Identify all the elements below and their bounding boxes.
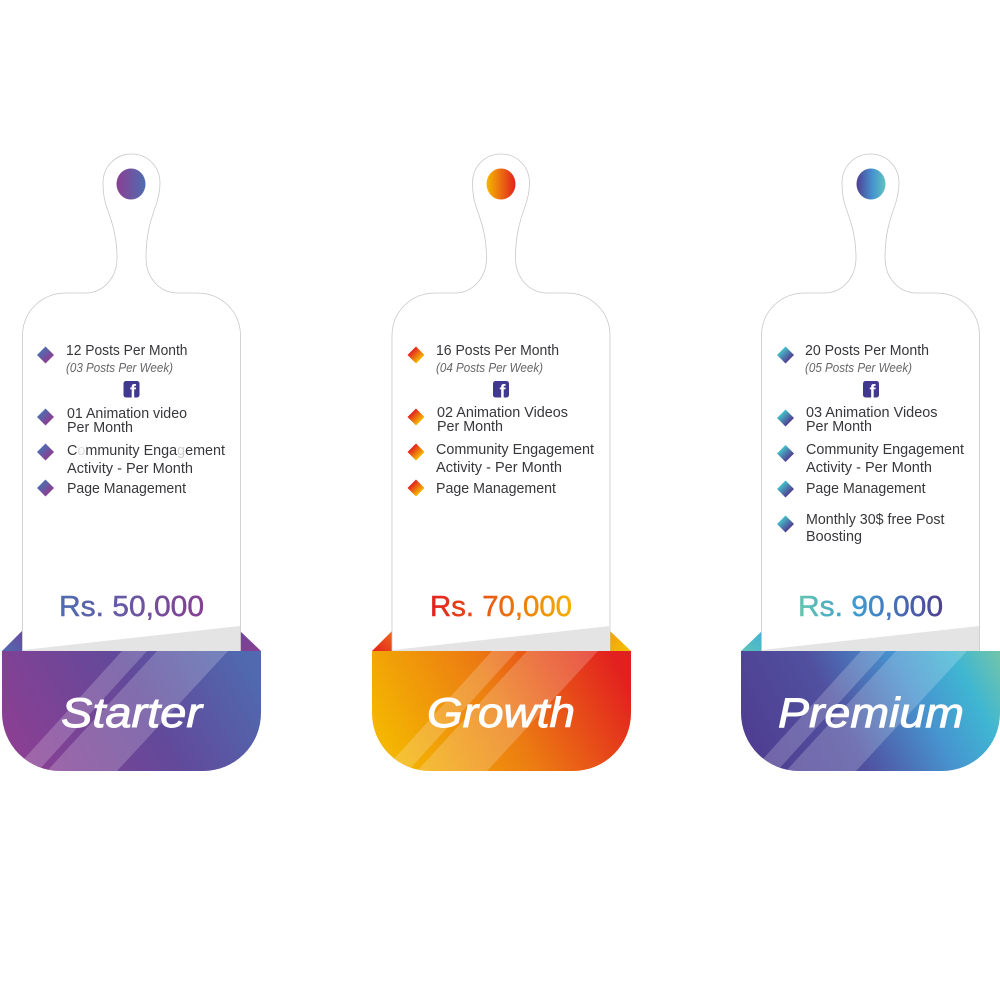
text: animation videos: 03 Animation Videos [806,405,938,421]
band title: Premium [778,689,964,736]
text: per month: Per Month [806,419,872,435]
icon: facebook: f [500,382,506,402]
icon: bullet 4 [777,480,794,498]
icon: bullet 1 [408,346,424,364]
paper shadow [23,626,240,651]
text: activity per month: Activity - Per Month [67,461,193,477]
text: boosting: Boosting [806,529,862,545]
icon: circle hole [116,168,146,200]
price: Rs. 90,000 [798,591,943,623]
text: posts per month: 16 Posts Per Month [436,343,559,359]
panel: Growth plan [372,154,631,771]
panel: Premium plan [741,154,1000,771]
card outline [392,154,610,651]
price: Rs. 70,000 [430,591,572,623]
text: posts per month: 12 Posts Per Month [66,343,188,359]
icon: bullet 1 [777,346,794,364]
fold triangles [372,631,631,651]
icon: facebook [493,381,509,402]
icon: bullet 5 [777,516,794,532]
text: community engagement: Community Engagement [806,442,964,458]
icon: circle hole [856,168,886,200]
icon: bullet 2 [408,408,424,426]
icon: facebook: f [130,382,137,402]
band [2,651,261,771]
icon: facebook [863,381,879,402]
icon: bullet 1 [37,346,54,364]
icon: bullet 3 [408,444,424,460]
text: posts per month: 20 Posts Per Month [805,343,929,359]
text: animation videos: 02 Animation Videos [437,405,568,421]
icon: bullet 3 [777,445,794,462]
text: activity per month: Activity - Per Month [436,460,562,476]
text: page management: Page Management [67,481,186,497]
band [372,651,631,771]
band title: Growth [427,689,575,736]
text: per month: Per Month [67,420,133,436]
text: posts per week: (03 Posts Per Week) [66,361,173,375]
card outline [22,154,240,651]
text: posts per week: (05 Posts Per Week) [805,361,912,375]
icon: facebook: f [870,382,876,402]
panel: Starter plan [2,154,261,771]
text: free post boosting: Monthly 30$ free Post [806,512,944,528]
icon: circle hole [486,168,516,200]
icon: bullet 4 [408,480,424,496]
price: Rs. 50,000 [59,591,204,623]
band [741,651,1000,771]
text: activity per month: Activity - Per Month [806,460,932,476]
fold triangles [2,631,261,651]
text: community engagement: Community Engagement [436,442,594,458]
card outline [762,154,980,651]
text: page management: Page Management [806,481,926,497]
text: animation video: 01 Animation video [67,406,187,422]
icon: bullet 2 [37,408,54,426]
band title: Starter [61,689,204,736]
icon: bullet 2 [777,410,794,426]
icon: bullet 4 [37,480,54,496]
paper shadow [393,626,610,651]
icon: bullet 3 [37,444,54,460]
text: community engagement: Community Engagement [67,443,225,459]
text: page management: Page Management [436,481,556,497]
text: posts per week: (04 Posts Per Week) [436,361,543,375]
fold triangle [741,631,762,651]
icon: facebook [124,381,140,402]
text: per month: Per Month [437,419,503,435]
paper shadow [762,626,979,651]
